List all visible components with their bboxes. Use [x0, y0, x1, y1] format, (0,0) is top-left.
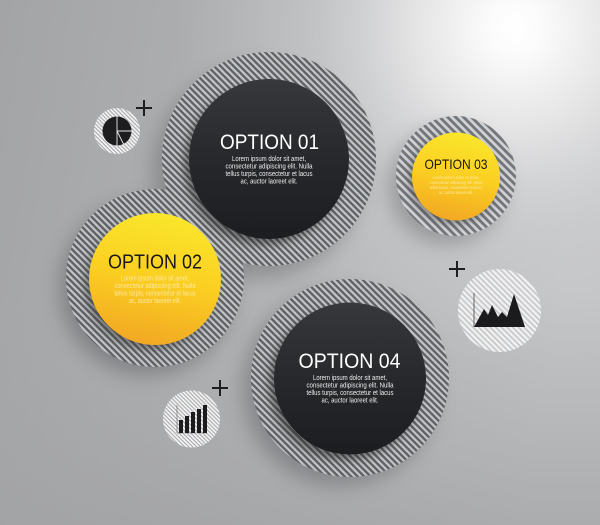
option 02 yellow disc: [85, 213, 221, 350]
option 01 body text: consectetur adipiscing elit. Nulla: [226, 164, 313, 170]
option 01 body text: Lorem ipsum dolor sit amet,: [232, 156, 306, 163]
option 01 group: [153, 52, 376, 277]
option 01 body text: [226, 156, 313, 186]
option 01 dark disc and text: [184, 79, 349, 245]
option 02 heading: OPTION 02: [108, 250, 202, 274]
icon: plus near pie chart: [136, 100, 152, 116]
icon: pie chart: [94, 108, 140, 154]
option 02 body text: ac, auctor laoreet elit.: [129, 298, 181, 305]
option 04 heading: OPTION 04: [298, 350, 401, 373]
option 03 group: [389, 116, 516, 244]
option 01 striped ring: [153, 52, 376, 277]
option 03 striped ring: [389, 116, 516, 244]
option 03 yellow disc: [409, 132, 500, 224]
option 04 body text: tellus turpis, consectetur et lacus: [306, 390, 394, 397]
option 03 body text: consectetur adipiscing elit. Nulla: [430, 180, 482, 185]
option 03 heading: OPTION 03: [424, 156, 488, 172]
option 03 body text: ac, auctor laoreet elit.: [439, 190, 473, 195]
option 03 body text: Lorem ipsum dolor sit amet,: [433, 175, 479, 180]
icon: area chart: [458, 269, 541, 352]
option 04 dark disc: [269, 302, 426, 460]
option 03 body text: tellus turpis, consectetur et lacus: [430, 185, 483, 190]
option 04 body text: [306, 375, 394, 404]
option 01 body text: tellus turpis, consectetur et lacus: [226, 171, 313, 178]
option 02 body text: tellus turpis, consectetur et lacus: [114, 290, 196, 298]
option 04 body text: Lorem ipsum dolor sit amet,: [313, 375, 387, 382]
icon: plus near area chart: [449, 261, 465, 277]
option 01 dark disc: [184, 79, 349, 245]
option 02 striped ring: [60, 189, 244, 375]
option 02 body text: consectetur adipiscing elit. Nulla: [114, 283, 196, 290]
option 01 heading: OPTION 01: [220, 131, 319, 154]
option 04 body text: consectetur adipiscing elit. Nulla: [306, 382, 394, 390]
option 04 group: [243, 279, 449, 485]
option 02 body text: Lorem ipsum dolor sit amet,: [121, 276, 189, 282]
option 01 body text: ac, auctor laoreet elit.: [240, 178, 298, 186]
icon: bar chart: [163, 390, 220, 448]
icon: plus near bar chart: [212, 380, 228, 396]
option 03 body text: [430, 175, 483, 195]
option 04 striped ring: [243, 279, 449, 485]
option 02 group: [60, 189, 244, 375]
option 04 body text: ac, auctor laoreet elit.: [322, 398, 379, 404]
option 02 body text: [114, 276, 196, 305]
